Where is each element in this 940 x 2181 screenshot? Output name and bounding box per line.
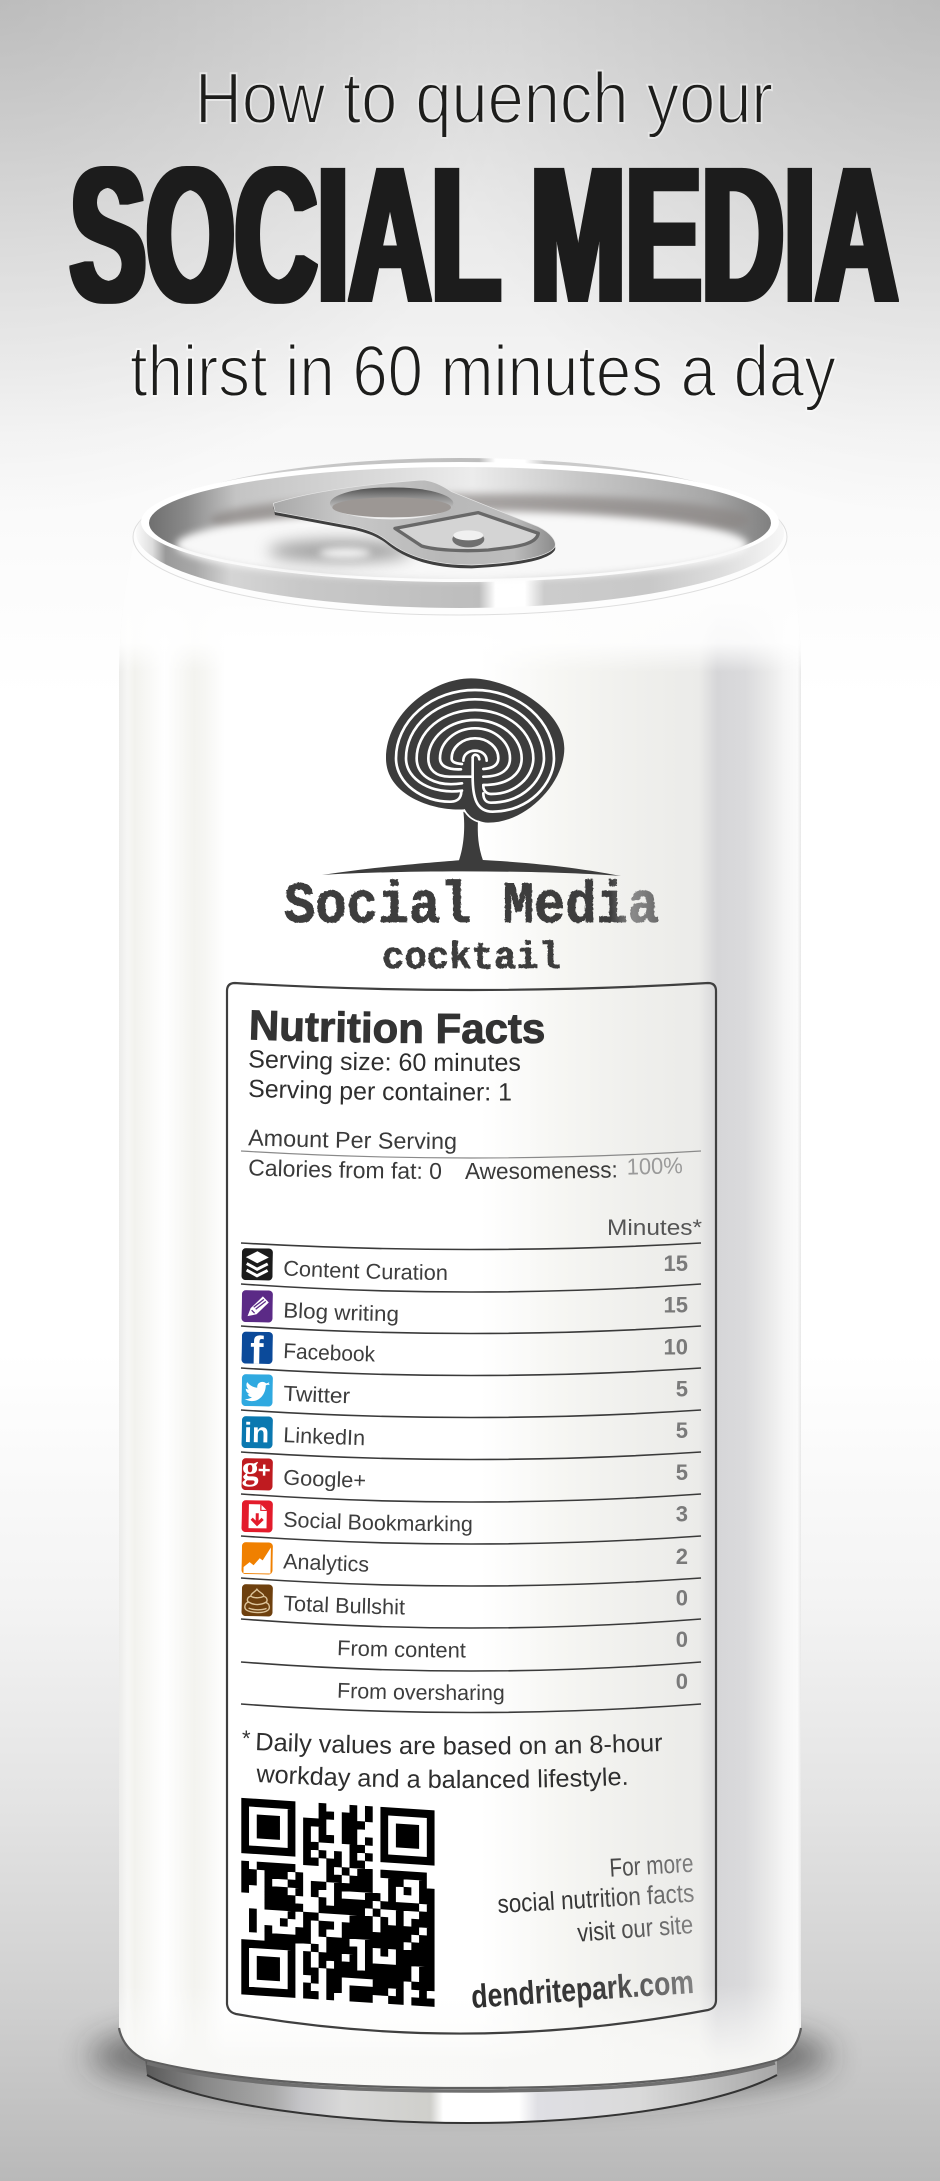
calories and awesomeness: Calories from fat: 0 — [249, 1160, 441, 1180]
call to action text: visit our site — [576, 1909, 694, 1948]
footnote — [242, 1726, 662, 1792]
call to action text: For more — [609, 1848, 694, 1883]
logo: labyrinth tree — [284, 678, 659, 980]
icon: analytics chart — [241, 1542, 273, 1575]
row: twitter: 5 — [676, 1377, 688, 1402]
row: blog writing — [240, 1290, 701, 1334]
row: total bullshit — [240, 1584, 701, 1629]
icon: facebook — [242, 1332, 273, 1364]
calories and awesomeness: Awesomeness: — [465, 1163, 616, 1180]
tree canopy and trunk — [386, 678, 564, 861]
row: social bookmarking: 3 — [676, 1502, 688, 1527]
qr code — [241, 1802, 435, 2003]
row: total bullshit: Total Bullshit — [284, 1596, 405, 1615]
row: analytics: Analytics — [283, 1554, 368, 1575]
logo wordmark: social media: Social Media — [284, 875, 659, 940]
row: content curation: 15 — [664, 1251, 688, 1276]
row: facebook: 10 — [664, 1334, 688, 1359]
title — [70, 59, 898, 412]
icon: google plus: + — [258, 1457, 271, 1483]
call to action text: social nutrition facts — [497, 1878, 695, 1919]
row: linkedin — [240, 1416, 701, 1460]
row: google plus: Google+ — [284, 1470, 365, 1491]
row: from oversharing — [240, 1669, 701, 1714]
tree ground line — [322, 860, 621, 876]
row: blog writing: 15 — [664, 1293, 688, 1318]
row: linkedin: 5 — [676, 1418, 688, 1443]
row: from oversharing: 0 — [676, 1669, 688, 1694]
icon: pencil — [241, 1290, 273, 1323]
can — [110, 458, 810, 2123]
calories and awesomeness: 100% — [628, 1158, 682, 1175]
title line: how to quench your: How to quench your — [195, 59, 773, 139]
call to action text — [497, 1848, 695, 1948]
row: social bookmarking: Social Bookmarking — [284, 1512, 472, 1536]
serving info: Serving per container: 1 — [249, 1080, 511, 1104]
can ground shadow — [88, 2012, 832, 2100]
row: from content: From content — [338, 1640, 466, 1658]
footnote: workday and a balanced lifestyle. — [256, 1766, 626, 1792]
can rim and lid — [133, 458, 787, 615]
row: analytics — [240, 1542, 701, 1587]
row: analytics: 2 — [676, 1544, 688, 1569]
row: facebook: Facebook — [284, 1343, 375, 1362]
amount per serving: Amount Per Serving — [248, 1130, 456, 1154]
title line: thirst in 60 minutes a day: thirst in 60 minutes a day — [130, 332, 836, 412]
row: social bookmarking — [240, 1500, 701, 1545]
logo wordmark: cocktail: cocktail — [382, 937, 561, 980]
icon: google plus: g — [241, 1450, 259, 1487]
icon: poop — [241, 1584, 273, 1617]
icon: bookmark document — [241, 1500, 273, 1533]
calories and awesomeness — [249, 1158, 682, 1180]
website url: dendritepark.com — [470, 1963, 695, 2015]
pull tab — [273, 480, 555, 568]
serving info: Serving size: 60 minutes — [249, 1050, 520, 1075]
heading: nutrition facts: Nutrition Facts — [250, 1010, 544, 1044]
can body — [110, 540, 810, 2095]
row: from oversharing: From oversharing — [338, 1682, 504, 1704]
row: google plus: 5 — [676, 1460, 688, 1485]
icon: twitter bird — [241, 1374, 273, 1407]
panel: nutrition facts label — [226, 982, 718, 2035]
can base ring — [145, 2058, 777, 2123]
row: content curation: Content Curation — [284, 1260, 446, 1280]
icon: linkedin: in — [244, 1417, 269, 1448]
footnote: * — [242, 1726, 251, 1751]
row: from content: 0 — [676, 1627, 688, 1652]
row: twitter: Twitter — [284, 1386, 350, 1404]
row: linkedin: LinkedIn — [284, 1427, 364, 1446]
icon: google plus — [242, 1458, 273, 1490]
row: google plus — [240, 1458, 701, 1503]
row: blog writing: Blog writing — [284, 1302, 398, 1326]
column header: minutes: Minutes* — [607, 1215, 702, 1240]
row: from content — [240, 1627, 701, 1672]
row: facebook — [240, 1332, 701, 1376]
icon: facebook: f — [250, 1329, 265, 1373]
row: twitter — [240, 1374, 701, 1418]
label frame — [227, 983, 716, 2034]
serving info — [249, 1050, 520, 1104]
row: content curation — [240, 1242, 701, 1293]
row: total bullshit: 0 — [676, 1586, 688, 1611]
footnote: Daily values are based on an 8-hour — [257, 1732, 662, 1757]
icon: buffer layers — [241, 1248, 273, 1281]
